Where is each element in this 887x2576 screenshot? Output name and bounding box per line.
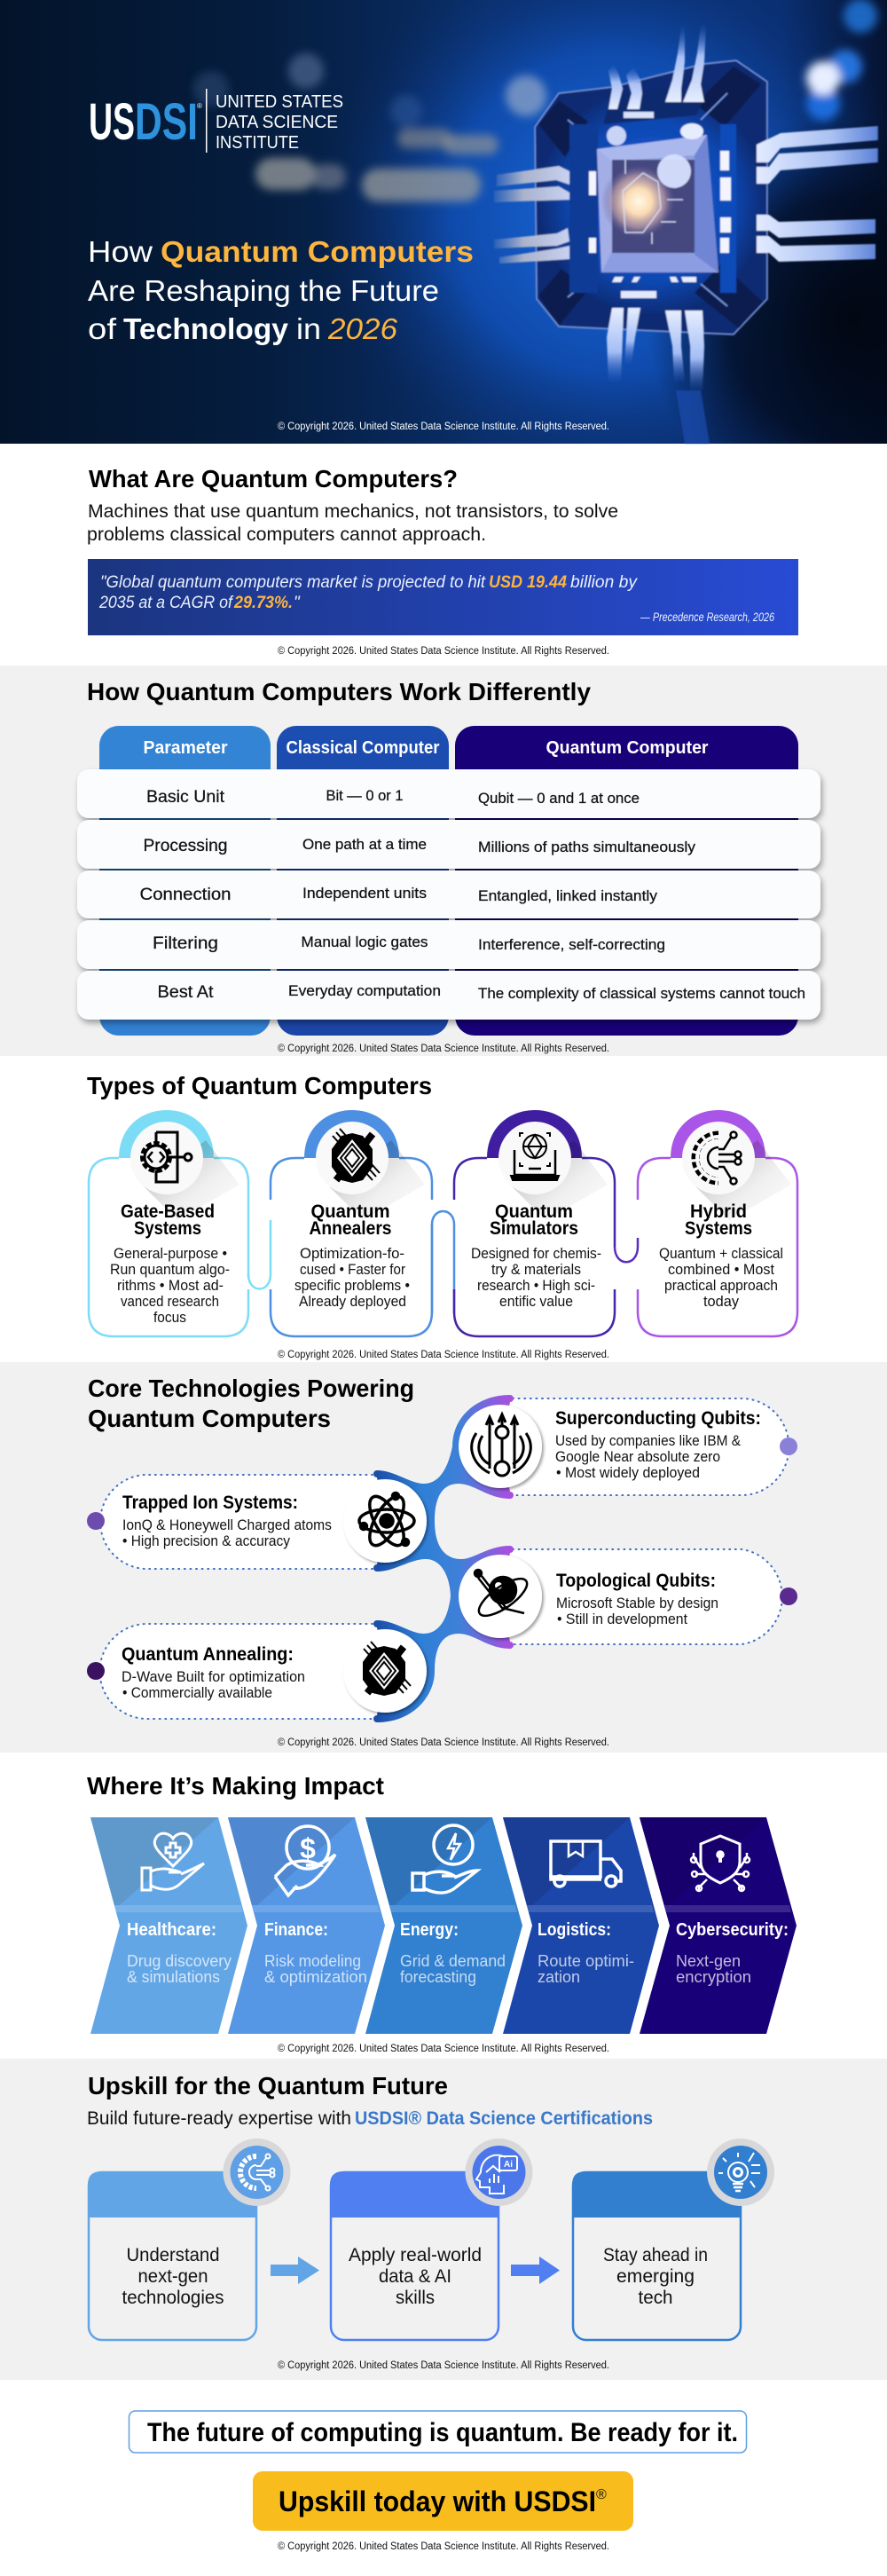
card: quantum simulators: try & materials <box>491 1261 581 1278</box>
icon: superconducting <box>472 1414 530 1476</box>
title <box>88 235 474 345</box>
text: Cybersecurity: <box>676 1920 789 1940</box>
title: How <box>88 235 153 268</box>
panel: hero banner <box>0 0 887 444</box>
card title and text: Gate-Based <box>121 1201 215 1222</box>
logo: USDSI: US <box>89 93 135 151</box>
text: trapped ion systems: • High precision & accuracy <box>122 1532 290 1549</box>
text <box>538 1920 634 1986</box>
arrow <box>511 2257 560 2284</box>
logo: USDSI: DSI <box>135 93 198 151</box>
card: quantum simulators: entific value <box>499 1293 573 1310</box>
card title and text <box>110 1201 230 1326</box>
row: best at <box>77 971 820 1020</box>
heading: Upskill for the Quantum Future <box>88 2072 448 2099</box>
heading: Core Technologies Powering <box>88 1375 414 1402</box>
row: connection: Entangled, linked instantly <box>478 887 657 904</box>
text: superconducting qubits: • Most widely deployed <box>556 1464 700 1481</box>
node: trapped ion <box>343 1479 427 1563</box>
callout: market quote: 29.73%. <box>233 594 293 612</box>
title: of <box>88 312 117 345</box>
card: apply <box>330 2139 532 2340</box>
icon: AI head <box>476 2155 517 2194</box>
callout: tagline <box>130 2411 747 2453</box>
icon: annealing chip <box>363 1642 411 1696</box>
icon: light bulb <box>718 2153 760 2191</box>
panel: what are quantum computers <box>87 465 798 657</box>
panel: where it's making impact <box>87 1772 797 2054</box>
icon: health hand <box>142 1833 204 1890</box>
copyright: © Copyright 2026. United States Data Science Institute. All Rights Reserved. <box>278 2044 609 2054</box>
card: quantum simulators: Simulators <box>490 1218 578 1239</box>
subheading: Build future-ready expertise with <box>87 2108 351 2129</box>
title: Technology <box>123 312 289 345</box>
panel: how quantum computers work differently <box>77 678 820 1054</box>
copyright: © Copyright 2026. United States Data Science Institute. All Rights Reserved. <box>278 2541 609 2552</box>
text: quantum annealing: • Commercially available <box>122 1684 272 1701</box>
card: quantum simulators <box>454 1110 638 1336</box>
heading: How Quantum Computers Work Differently <box>87 678 591 705</box>
card title and text: General-purpose • <box>114 1245 227 1262</box>
text: topological qubits: Microsoft Stable by design <box>556 1595 718 1611</box>
text: Risk modeling <box>264 1952 361 1970</box>
chevron: finance <box>228 1817 385 2034</box>
card: apply: data & AI <box>379 2266 451 2287</box>
text: topological qubits: Topological Qubits: <box>556 1571 716 1591</box>
text <box>676 1920 789 1986</box>
subheading: USDSI® Data Science Certifications <box>355 2108 653 2129</box>
icon: hybrid gear circuit <box>695 1132 742 1184</box>
card: stay ahead: tech <box>639 2288 672 2308</box>
copyright: © Copyright 2026. United States Data Science Institute. All Rights Reserved. <box>278 1044 609 1054</box>
node: superconducting qubits <box>459 1405 542 1488</box>
copyright: © Copyright 2026. United States Data Science Institute. All Rights Reserved. <box>278 1350 609 1360</box>
card: stay ahead: Stay ahead in <box>603 2245 708 2265</box>
chevron: cybersecurity <box>640 1817 797 2034</box>
callout: market quote: USD 19.44 <box>489 573 567 592</box>
text: Logistics: <box>538 1920 611 1940</box>
text: & simulations <box>127 1968 220 1986</box>
node: topological <box>459 1555 542 1638</box>
chevron: logistics <box>503 1817 659 2034</box>
card title and text: rithms • Most ad- <box>117 1277 224 1294</box>
connector trunk <box>373 1395 514 1722</box>
column: parameter <box>99 726 271 1036</box>
icon: topological <box>474 1570 532 1622</box>
card: quantum annealers: Annealers <box>309 1218 392 1239</box>
heading: Types of Quantum Computers <box>87 1072 432 1099</box>
title: in <box>296 312 321 345</box>
hero image: bottom pins <box>607 308 624 382</box>
panel: upskill for the quantum future <box>87 2072 774 2371</box>
icon: gate code gear <box>143 1132 192 1182</box>
copyright: © Copyright 2026. United States Data Science Institute. All Rights Reserved. <box>278 421 609 432</box>
text: Energy: <box>400 1920 459 1940</box>
hero image: top pins <box>608 64 623 109</box>
heading: Quantum Computers <box>88 1405 331 1432</box>
card title and text: vanced research <box>121 1293 219 1310</box>
panel: core technologies <box>87 1375 797 1748</box>
row: best at: Everyday computation <box>288 982 441 999</box>
logo: USDSI <box>89 89 343 153</box>
panel: types of quantum computers <box>87 1072 797 1360</box>
callout: market quote: — Precedence Research, 2026 <box>640 610 774 624</box>
text: & optimization <box>264 1968 367 1986</box>
card: quantum annealers: cused • Faster for <box>300 1261 405 1278</box>
heading <box>88 1375 414 1432</box>
card: stay ahead: emerging <box>616 2266 695 2287</box>
card: apply: Apply real-world <box>349 2245 482 2265</box>
row: connection: Connection <box>140 886 231 904</box>
intro text <box>87 501 618 545</box>
card title and text: focus <box>153 1309 186 1326</box>
callout: market quote: billion by <box>570 573 639 592</box>
row: connection: Independent units <box>302 885 427 902</box>
card: gate-based systems <box>89 1110 271 1336</box>
card: hybrid systems: Quantum + classical <box>659 1245 783 1262</box>
card: understand <box>88 2139 291 2340</box>
text <box>400 1920 506 1986</box>
logo: USDSI: ® <box>197 102 202 110</box>
text: trapped ion systems <box>122 1493 332 1549</box>
card: quantum annealers <box>271 1110 454 1336</box>
copyright: © Copyright 2026. United States Data Science Institute. All Rights Reserved. <box>278 2360 609 2371</box>
card: quantum simulators: Designed for chemis- <box>471 1245 601 1262</box>
row: basic unit: Bit — 0 or 1 <box>326 787 403 804</box>
card: understand: next-gen <box>138 2266 208 2287</box>
icon: truck <box>551 1841 621 1887</box>
row: filtering: Filtering <box>153 934 218 953</box>
row: processing: One path at a time <box>302 836 427 853</box>
callout: tagline: The future of computing is quantum. Be ready for it. <box>147 2418 738 2447</box>
row: processing: Millions of paths simultaneously <box>478 839 696 855</box>
row: basic unit: Basic Unit <box>146 788 225 807</box>
panel: closing call to action <box>130 2411 747 2552</box>
card: quantum annealers: specific problems • <box>294 1277 410 1294</box>
icon: annealer chip <box>332 1129 380 1183</box>
card title and text: Run quantum algo- <box>110 1261 230 1278</box>
text: Route optimi- <box>538 1952 634 1970</box>
callout: market quote: "Global quantum computers market is projected to hit <box>100 573 486 592</box>
card: quantum annealers: Optimization-fo- <box>300 1245 404 1262</box>
column: classical computer <box>277 726 449 1036</box>
text: superconducting qubits: Used by companies like IBM & <box>555 1432 742 1449</box>
text: superconducting qubits: Superconducting Qubits: <box>555 1408 761 1429</box>
text: Finance: <box>264 1920 328 1940</box>
card: quantum simulators: research • High sci- <box>477 1277 595 1294</box>
card: quantum simulators: Quantum <box>495 1201 573 1222</box>
callout: market quote: " <box>294 594 301 612</box>
heading: What Are Quantum Computers? <box>89 465 458 492</box>
card: quantum annealers: Already deployed <box>299 1293 406 1310</box>
row: best at: The complexity of classical systems cannot touch <box>478 985 805 1002</box>
logo: USDSI: DATA SCIENCE <box>216 113 338 132</box>
text: Next-gen <box>676 1952 741 1970</box>
column: parameter: Parameter <box>144 738 228 758</box>
text: topological qubits: • Still in development <box>557 1611 687 1627</box>
button: upskill today: Upskill today with USDSI <box>279 2485 596 2517</box>
text: zation <box>538 1968 580 1986</box>
card: hybrid systems: combined • Most <box>668 1261 774 1278</box>
heading: Where It’s Making Impact <box>87 1772 384 1800</box>
card: understand: Understand <box>126 2245 220 2265</box>
logo: USDSI: INSTITUTE <box>216 133 299 153</box>
card: hybrid systems: Systems <box>685 1218 752 1239</box>
hero image: bokeh lights <box>193 53 546 201</box>
button: upskill today <box>253 2471 633 2531</box>
card: stay ahead <box>572 2139 774 2340</box>
text: quantum annealing: D-Wave Built for optimization <box>122 1668 305 1685</box>
icon: finance hand: $ <box>300 1832 316 1864</box>
row: best at: Best At <box>158 983 214 1002</box>
icon: energy hand <box>412 1825 477 1893</box>
chevron: healthcare <box>90 1817 247 2034</box>
card: hybrid systems <box>638 1110 797 1336</box>
item: topological qubits pill <box>510 1549 797 1644</box>
column: quantum computer <box>455 726 798 1036</box>
title: 2026 <box>327 312 398 345</box>
icon: atom <box>359 1492 414 1550</box>
column: quantum computer: Quantum Computer <box>546 738 709 758</box>
card: apply: skills <box>396 2288 435 2308</box>
chevron: energy <box>365 1817 522 2034</box>
hero image: right pins <box>757 126 878 262</box>
text: forecasting <box>400 1968 476 1986</box>
node: quantum annealing <box>343 1629 427 1713</box>
hero image: chip <box>494 25 878 444</box>
title: Are Reshaping the Future <box>88 274 439 307</box>
column: classical computer: Classical Computer <box>286 738 440 758</box>
card title and text: Systems <box>134 1218 201 1239</box>
icon: AI head: Ai <box>504 2160 513 2170</box>
text: superconducting qubits: Google Near absolute zero <box>555 1448 720 1465</box>
button: upskill today: ® <box>596 2487 607 2502</box>
hero image: left pins <box>494 166 569 264</box>
copyright: © Copyright 2026. United States Data Science Institute. All Rights Reserved. <box>278 646 609 657</box>
title: Quantum Computers <box>161 235 474 268</box>
copyright: © Copyright 2026. United States Data Science Institute. All Rights Reserved. <box>278 1737 609 1748</box>
text: topological qubits <box>556 1571 718 1627</box>
card: hybrid systems: today <box>703 1293 739 1310</box>
row: connection <box>77 870 820 918</box>
text: quantum annealing: Quantum Annealing: <box>122 1644 294 1665</box>
row: basic unit: Qubit — 0 and 1 at once <box>478 790 640 807</box>
logo: USDSI: UNITED STATES <box>216 92 343 112</box>
icon: finance hand <box>275 1826 335 1895</box>
arrow <box>271 2257 319 2284</box>
item: trapped ion systems pill <box>87 1475 377 1569</box>
card: understand: technologies <box>122 2288 224 2308</box>
card: hybrid systems: practical approach <box>664 1277 778 1294</box>
text: trapped ion systems: Trapped Ion Systems: <box>122 1493 298 1513</box>
icon: laptop molecule <box>511 1133 559 1180</box>
callout: market quote <box>88 559 798 635</box>
card: hybrid systems: Hybrid <box>690 1201 747 1222</box>
text: quantum annealing <box>122 1644 305 1701</box>
text: Healthcare: <box>127 1920 216 1940</box>
text: Grid & demand <box>400 1952 506 1970</box>
intro text: Machines that use quantum mechanics, not transistors, to solve <box>88 501 618 522</box>
row: basic unit <box>77 769 820 818</box>
icon: shield circuit <box>691 1836 750 1891</box>
text: trapped ion systems: IonQ & Honeywell Charged atoms <box>122 1516 332 1533</box>
row: filtering <box>77 920 820 969</box>
text: encryption <box>676 1968 751 1986</box>
subheading <box>87 2108 653 2129</box>
card: quantum annealers: Quantum <box>310 1201 390 1222</box>
item: quantum annealing pill <box>87 1624 377 1719</box>
row: filtering: Manual logic gates <box>302 934 428 950</box>
text <box>127 1920 232 1986</box>
item: superconducting qubits <box>510 1398 797 1495</box>
intro text: problems classical computers cannot approach. <box>87 524 486 545</box>
row: processing <box>77 820 820 869</box>
row: filtering: Interference, self-correcting <box>478 936 665 953</box>
row: processing: Processing <box>144 837 227 855</box>
comparison table <box>77 726 820 1036</box>
icon: gear circuit <box>240 2155 275 2190</box>
text <box>264 1920 367 1986</box>
callout: market quote: 2035 at a CAGR of <box>98 594 234 612</box>
text: Drug discovery <box>127 1952 232 1970</box>
text: superconducting qubits <box>555 1408 761 1481</box>
